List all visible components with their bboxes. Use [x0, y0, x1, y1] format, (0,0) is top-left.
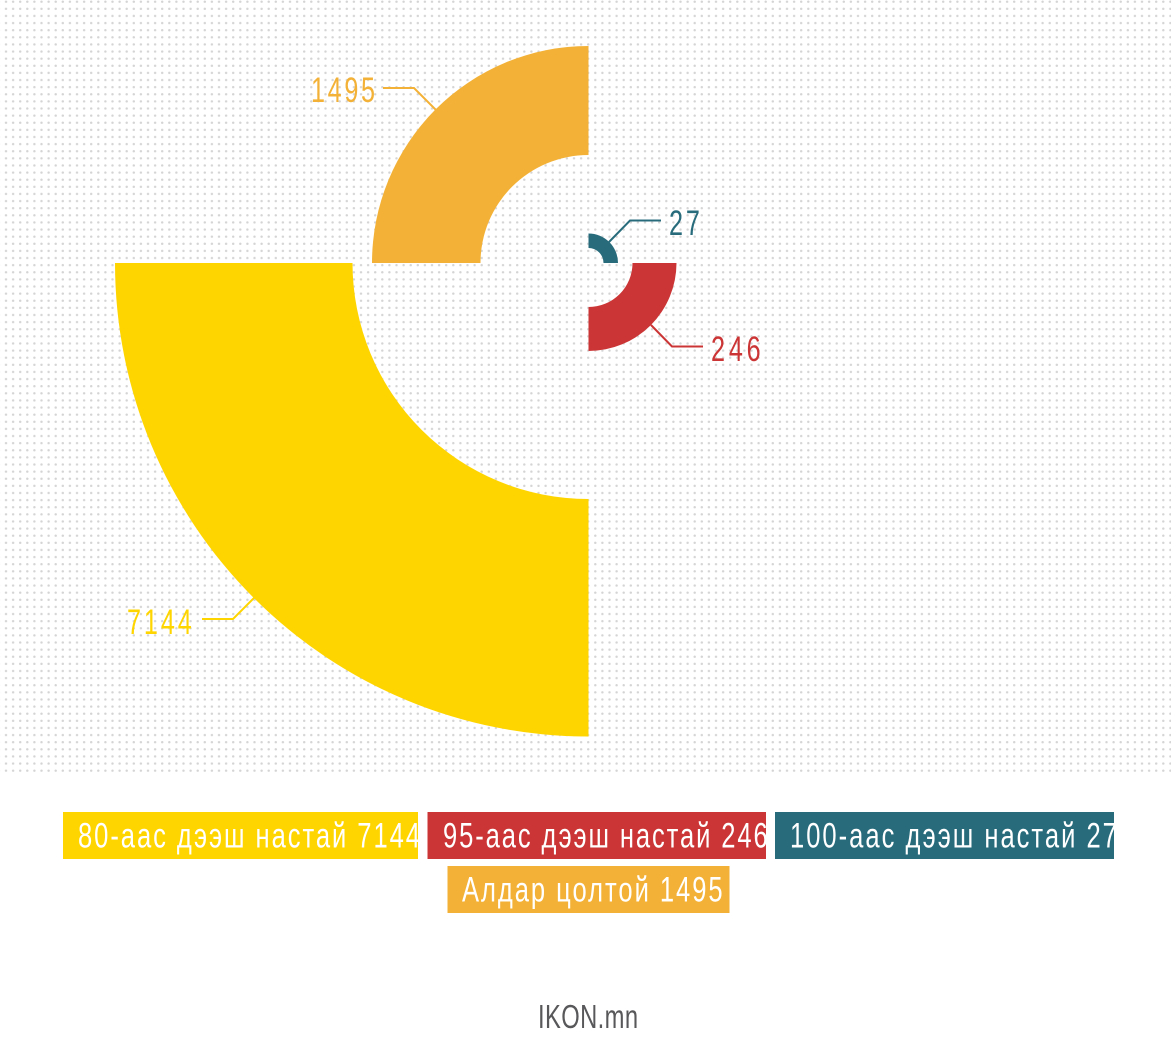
- segment: 100+ teal arc: [588, 234, 618, 263]
- legend: 95+: 95-аас дээш настай 246: [443, 815, 768, 856]
- callout: 1495: [311, 71, 436, 110]
- callout: 7144: 7144: [127, 603, 192, 642]
- callout: 1495: 1495: [311, 71, 375, 110]
- legend: 100+: 100-аас дээш настай 27: [790, 815, 1117, 856]
- callout: 27: [609, 204, 700, 243]
- legend: honoured: Алдар цолтой 1495: [462, 869, 723, 910]
- source credit: IKON.mn: [538, 999, 638, 1036]
- callout: 7144: [127, 597, 255, 642]
- legend: 80+: 80-аас дээш настай 7144: [78, 815, 420, 856]
- callout: 246: 246: [711, 330, 761, 369]
- segment: 95+ red arc: [588, 263, 676, 351]
- segment: honoured orange arc: [372, 46, 588, 263]
- callout: 246: [651, 325, 761, 369]
- segment: 80+ yellow arc: [115, 263, 588, 736]
- callout: 27: 27: [669, 204, 700, 243]
